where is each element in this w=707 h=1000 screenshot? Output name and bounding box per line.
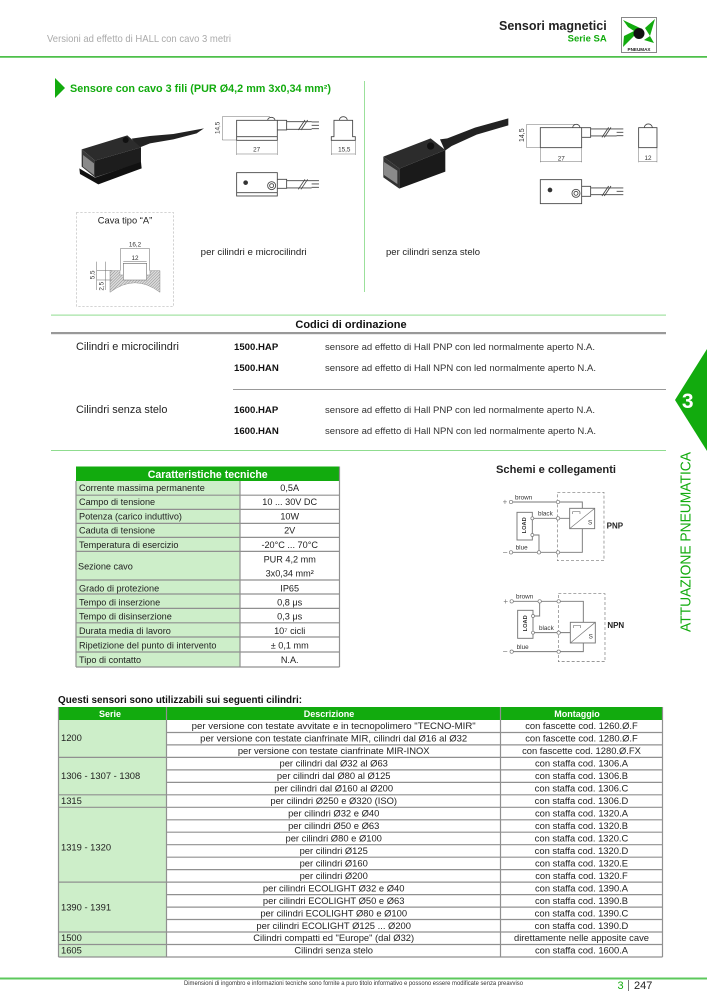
slot drawing: 12 <box>131 255 139 262</box>
description column: per cilindri Ø32 e Ø40 <box>288 808 379 818</box>
technical table rows: Campo di tensione <box>79 497 155 507</box>
description column: per cilindri Ø50 e Ø63 <box>288 820 379 831</box>
code 1600.HAN <box>234 426 596 437</box>
drawing: side view: 27 <box>558 155 565 162</box>
cylinders table header <box>58 707 662 720</box>
diagram: PNP: brown <box>515 494 533 501</box>
series column: 1605 <box>61 945 82 956</box>
technical table rows: Sezione cavo <box>78 561 133 571</box>
description column: per versione con testate cianfrinate MIR, cilindri dal Ø16 al Ø32 <box>200 733 467 744</box>
group label: rodless: Cilindri senza stelo <box>76 404 167 416</box>
diagram: NPN: − <box>503 647 508 657</box>
technical table rows: 0,8 μs <box>277 598 303 608</box>
slot drawing: 16,2 <box>129 242 142 249</box>
mounting column: con fascette cod. 1280.Ø.F <box>525 733 638 744</box>
slot drawing <box>90 242 160 292</box>
description column: per cilindri Ø160 <box>300 857 368 868</box>
series column: 1315 <box>61 795 82 806</box>
codes heading: Codici di ordinazione <box>295 319 407 331</box>
description column: per cilindri Ø80 e Ø100 <box>285 832 382 844</box>
mounting column: con staffa cod. 1306.A <box>535 758 629 769</box>
diagram: PNP: LOAD <box>522 517 528 533</box>
description column: per cilindri dal Ø160 al Ø200 <box>274 783 393 794</box>
description column: per cilindri Ø200 <box>300 870 368 881</box>
code 1500.HAP: sensore ad effetto di Hall PNP con led normalmente aperto N.A. <box>325 342 595 352</box>
diagram: NPN: + <box>503 597 508 606</box>
description column: per cilindri dal Ø80 al Ø125 <box>277 770 391 781</box>
technical table rows: Tipo di contatto <box>79 655 141 665</box>
technical table rows: 3x0,34 mm² <box>266 569 314 579</box>
technical table rows: Potenza (carico induttivo) <box>79 511 182 521</box>
cylinders table header: Descrizione <box>304 709 354 719</box>
technical table rows: PUR 4,2 mm <box>264 554 316 564</box>
mounting column: direttamente nelle apposite cave <box>514 932 649 943</box>
header title: Sensori magnetici <box>499 19 607 33</box>
diagram: NPN: S <box>589 634 593 641</box>
description column: Cilindri compatti ed "Europe" (dal Ø32) <box>253 932 414 943</box>
technical table rows: 0,3 μs <box>277 612 303 622</box>
diagram: NPN: blue <box>517 644 529 651</box>
technical table rows: 10⁷ cicli <box>274 626 305 636</box>
chapter number: 3 <box>682 390 694 413</box>
mounting column: con staffa cod. 1390.A <box>535 882 629 893</box>
technical table rows: Temperatura di esercizio <box>79 540 178 550</box>
logo: Pneumax <box>622 18 656 52</box>
diagram: PNP: blue <box>516 544 528 551</box>
technical table rows: 2V <box>284 526 296 536</box>
page number: 3 <box>618 980 624 992</box>
PNP label: PNP <box>607 521 624 530</box>
mounting column: con staffa cod. 1320.C <box>535 832 629 844</box>
description column: per versione con testate cianfrinate MIR-INOX <box>238 745 430 756</box>
description column: per cilindri dal Ø32 al Ø63 <box>280 758 388 769</box>
page number <box>618 980 652 992</box>
cylinders table header: Serie <box>99 709 121 719</box>
diagram: NPN: LOAD <box>523 615 529 631</box>
diagram: PNP: S <box>588 520 592 527</box>
mounting column: con staffa cod. 1390.C <box>535 907 629 918</box>
mounting column: con staffa cod. 1320.D <box>535 845 629 856</box>
table: compatible cylinders <box>58 707 662 957</box>
mounting column: con staffa cod. 1320.F <box>535 870 628 881</box>
header <box>0 18 707 58</box>
description column: per cilindri ECOLIGHT Ø80 e Ø100 <box>260 907 407 918</box>
series column: 1319 - 1320 <box>61 842 111 852</box>
series column: 1500 <box>61 932 82 943</box>
code 1600.HAP: 1600.HAP <box>234 405 279 416</box>
technical table rows: 10 ... 30V DC <box>262 497 317 507</box>
photo: sensor 2 <box>383 118 508 189</box>
drawing: side view: 14,5 <box>215 121 222 134</box>
mounting column: con staffa cod. 1320.A <box>535 808 629 818</box>
code 1500.HAN <box>234 363 596 374</box>
group label: cylinders: Cilindri e microcilindri <box>76 341 179 353</box>
mounting column: con staffa cod. 1306.C <box>535 783 629 794</box>
panel: sensor for cylinders and microcylinders <box>76 117 355 306</box>
code 1600.HAN: 1600.HAN <box>234 426 279 437</box>
caption: cylinders and microcylinders: per cilindri e microcilindri <box>201 247 307 258</box>
slot drawing: 5,5 <box>90 270 97 279</box>
header series: Serie SA <box>568 34 607 44</box>
header rule <box>0 56 707 58</box>
heading arrow <box>55 78 65 98</box>
technical table rows: Tempo di inserzione <box>79 598 160 608</box>
technical table header: Caratteristiche tecniche <box>148 469 268 481</box>
panel: order codes <box>51 315 666 451</box>
section subtitle: Versioni ad effetto di HALL con cavo 3 metri <box>47 33 231 45</box>
slot drawing: 2,5 <box>99 281 106 291</box>
technical table rows: Tempo di disinserzione <box>79 612 172 622</box>
drawing: side view <box>215 117 355 155</box>
drawing: top view <box>540 180 623 204</box>
page number: 247 <box>634 980 652 992</box>
description column: per cilindri ECOLIGHT Ø125 ... Ø200 <box>256 920 411 931</box>
mounting column: con staffa cod. 1600.A <box>535 945 629 956</box>
mounting column: con staffa cod. 1320.E <box>535 857 628 868</box>
mounting column: con staffa cod. 1390.D <box>535 920 629 931</box>
diagram: NPN <box>503 594 624 662</box>
mounting column: con staffa cod. 1306.B <box>535 770 628 781</box>
technical table rows <box>78 483 318 665</box>
series column: 1306 - 1307 - 1308 <box>61 770 140 781</box>
technical table rows: Corrente massima permanente <box>79 483 205 493</box>
code 1600.HAN: sensore ad effetto di Hall NPN con led normalmente aperto N.A. <box>325 426 596 436</box>
technical table rows: 10W <box>280 511 299 521</box>
code 1500.HAP <box>234 342 595 353</box>
panel: sensor for rodless cylinders <box>383 118 657 204</box>
diagram: PNP <box>503 492 624 561</box>
description column: per cilindri ECOLIGHT Ø32 e Ø40 <box>263 882 404 893</box>
heading text: Sensore con cavo 3 fili (PUR Ø4,2 mm 3x0,34 mm²) <box>70 83 331 95</box>
callout: slot type A <box>76 213 174 306</box>
caption: rodless cylinders: per cilindri senza stelo <box>386 247 480 258</box>
drawing: end view <box>639 124 657 162</box>
diagram: PNP: black <box>538 511 554 518</box>
cylinders table header: Montaggio <box>554 709 600 719</box>
mounting column: con fascette cod. 1260.Ø.F <box>525 720 638 731</box>
technical table rows: Durata media di lavoro <box>79 626 171 636</box>
code 1600.HAP <box>234 405 595 416</box>
technical table rows: Ripetizione del punto di intervento <box>79 640 216 650</box>
code 1600.HAP: sensore ad effetto di Hall PNP con led normalmente aperto N.A. <box>325 405 595 415</box>
mounting column: con fascette cod. 1280.Ø.FX <box>522 745 642 756</box>
chapter tab <box>675 349 707 451</box>
mounting column: con staffa cod. 1390.B <box>535 895 628 906</box>
description column: per cilindri Ø250 e Ø320 (ISO) <box>270 795 397 806</box>
drawing: side view: 27 <box>253 146 261 153</box>
cylinders heading: Questi sensori sono utilizzabili sui seguenti cilindri: <box>58 695 302 706</box>
code 1500.HAN: sensore ad effetto di Hall NPN con led normalmente aperto N.A. <box>325 363 596 373</box>
drawing: end view: 15,5 <box>338 147 351 154</box>
drawing: side view <box>519 124 657 162</box>
description column: per cilindri ECOLIGHT Ø50 e Ø63 <box>263 895 404 906</box>
series column: 1200 <box>61 732 82 743</box>
description column: per versione con testate avvitate e in tecnopolimero "TECNO-MIR" <box>192 720 476 731</box>
code 1500.HAP: 1500.HAP <box>234 342 279 353</box>
technical table rows: ± 0,1 mm <box>271 640 309 650</box>
slot label: Cava tipo “A” <box>98 215 152 225</box>
table: technical characteristics <box>76 466 340 667</box>
diagram: PNP: − <box>503 547 508 557</box>
description column <box>192 720 476 956</box>
description column: Cilindri senza stelo <box>294 945 373 956</box>
footer note: Dimensioni di ingombro e informazioni tecniche sono fornite a puro titolo informativo e possono essere modificate senza preavviso <box>184 980 523 987</box>
diagram: NPN: brown <box>516 594 534 601</box>
diagram: NPN: black <box>539 625 555 632</box>
wiring heading: Schemi e collegamenti <box>496 464 616 476</box>
drawing: end view <box>331 117 355 154</box>
logo: Pneumax: PNEUMAX <box>628 47 651 52</box>
technical table rows: -20°C ... 70°C <box>261 540 318 550</box>
technical table rows: Grado di protezione <box>79 583 159 593</box>
code 1500.HAN: 1500.HAN <box>234 363 279 374</box>
drawing: end view: 12 <box>644 155 652 162</box>
NPN label: NPN <box>607 621 624 630</box>
technical table rows: 0,5A <box>280 483 300 493</box>
drawing: top view <box>237 173 319 196</box>
mounting column: con staffa cod. 1306.D <box>535 795 629 806</box>
technical table rows: N.A. <box>281 655 299 665</box>
series column <box>61 732 140 956</box>
technical table rows: Caduta di tensione <box>79 526 155 536</box>
chapter vertical label: ATTUAZIONE PNEUMATICA <box>678 452 694 632</box>
technical table rows: IP65 <box>280 583 299 593</box>
photo: sensor 1 <box>79 128 204 184</box>
diagram: PNP: + <box>503 498 508 507</box>
drawing: side view: 14,5 <box>519 128 526 142</box>
description column: per cilindri Ø125 <box>300 845 368 856</box>
mounting column <box>514 720 649 956</box>
footer <box>0 978 707 992</box>
product heading <box>55 78 331 98</box>
series column: 1390 - 1391 <box>61 902 111 912</box>
mounting column: con staffa cod. 1320.B <box>535 820 628 831</box>
technical table header <box>76 466 340 481</box>
